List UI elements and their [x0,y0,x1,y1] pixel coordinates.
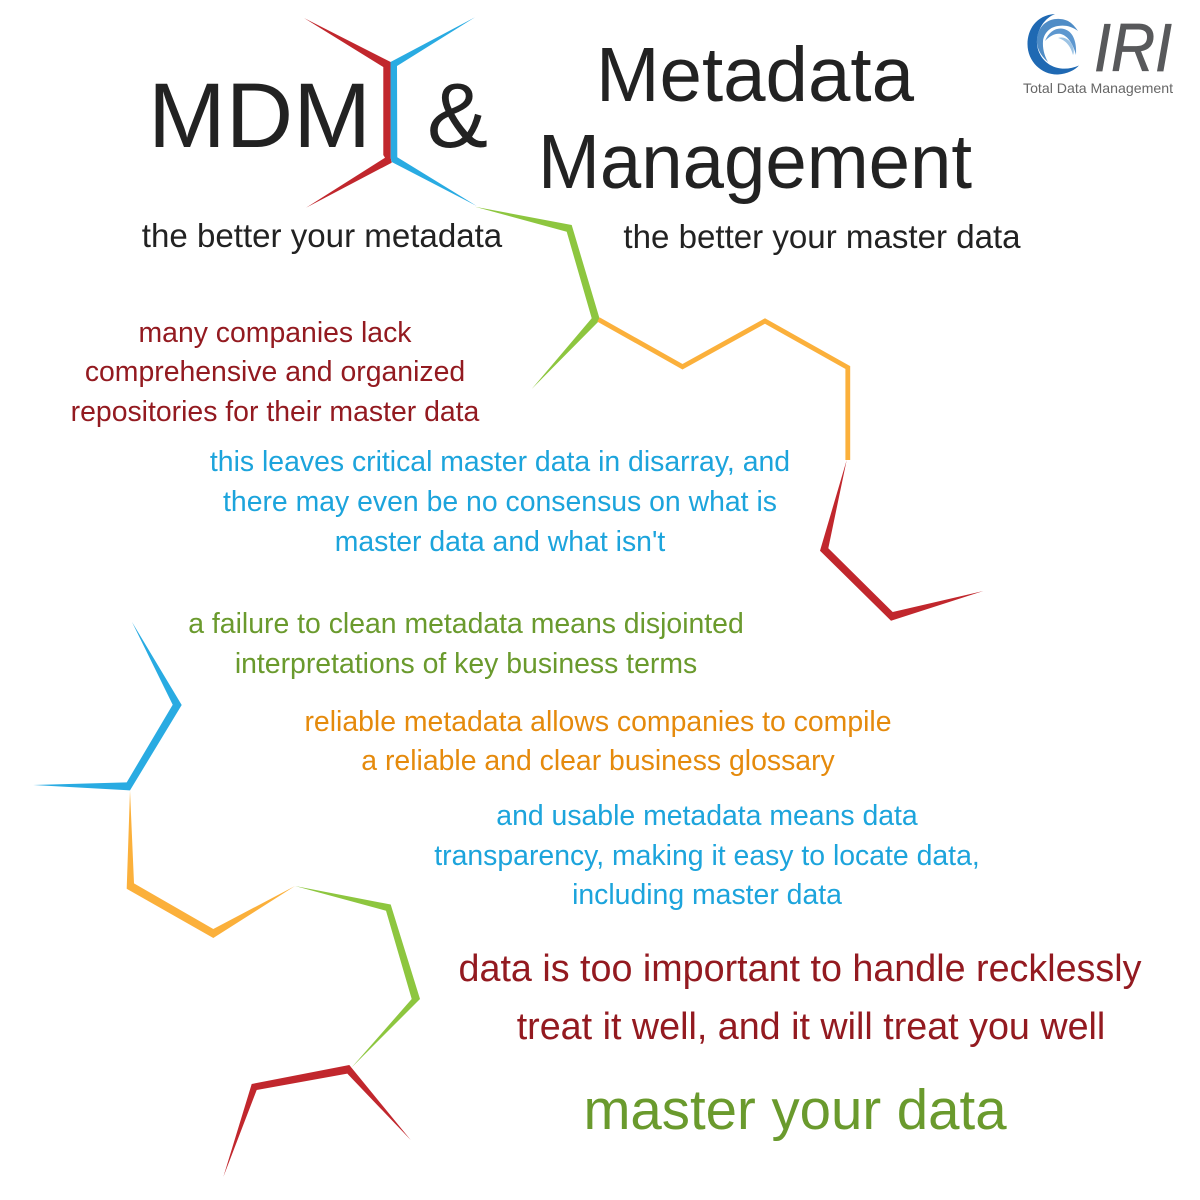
text block: usable metadata transparency: transparency, making it easy to locate data, [434,840,980,872]
title: MDM & Metadata Management: Management [538,119,972,205]
text block: usable metadata transparency: including master data [572,879,842,911]
text block: many companies lack repositories: comprehensive and organized [85,356,465,388]
text block: usable metadata transparency [434,800,980,911]
arrow: lower red segment [223,1065,411,1177]
title: MDM & Metadata Management [148,32,972,205]
text block: failure to clean metadata: interpretations of key business terms [235,648,697,680]
text block: many companies lack repositories: many companies lack [139,317,412,349]
text block: many companies lack repositories [71,317,480,428]
wordmark: IRI: IRI [1094,10,1172,86]
callout: data is too important: treat it well, and it will treat you well [517,1005,1105,1047]
text block: master data in disarray: master data and what isn't [335,526,665,558]
arrow: upper orange segment [598,320,848,460]
text block: master data in disarray: there may even be no consensus on what is [223,486,777,518]
arrow: upper red segment [820,460,983,621]
icon: red and blue X emblem [304,17,477,208]
title: MDM & Metadata Management: & [427,65,488,167]
text block: master data in disarray [210,446,790,558]
text block: usable metadata transparency: and usable metadata means data [496,800,918,832]
logo: IRI Total Data Management [1023,10,1173,96]
text block: failure to clean metadata [188,608,744,680]
text block: master data in disarray: this leaves critical master data in disarray, and [210,446,790,478]
text block: reliable metadata glossary: reliable metadata allows companies to compile [304,706,892,738]
subheading: the better your master data: the better your master data [623,219,1021,256]
arrow: upper green segment [475,207,600,389]
tagline: Total Data Management: Total Data Management [1023,80,1173,96]
text block: reliable metadata glossary: a reliable and clear business glossary [361,745,836,777]
arrow: lower green segment [295,886,420,1067]
title: MDM & Metadata Management: Metadata [596,32,914,118]
subheading: the better your metadata: the better your metadata [142,218,503,255]
closing line: master your data: master your data [583,1078,1007,1141]
text block: reliable metadata glossary [304,706,892,777]
callout: data is too important [459,947,1142,1047]
text block: failure to clean metadata: a failure to clean metadata means disjointed [188,608,744,640]
title: MDM & Metadata Management: MDM [148,65,371,167]
arrow: lower blue segment [33,622,182,790]
callout: data is too important: data is too important to handle recklessly [459,947,1142,989]
arrow: lower orange segment [127,790,295,938]
text block: many companies lack repositories: repositories for their master data [71,396,480,428]
icon: IRI swirl [1028,14,1079,75]
